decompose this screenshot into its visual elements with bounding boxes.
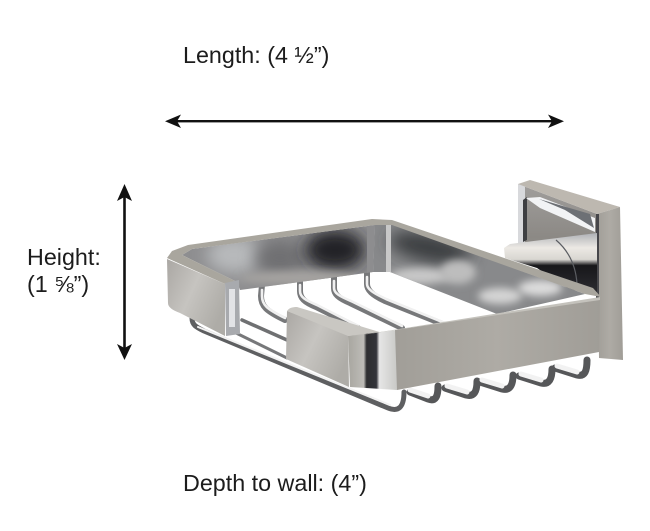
side wires: [242, 320, 287, 340]
front band: [348, 297, 600, 390]
heading: height label: (1 ⅝”): [27, 271, 89, 297]
heading: height label: [27, 244, 101, 297]
heading: length label: Length: (4 ½”): [183, 42, 329, 68]
bracket arm: [504, 233, 597, 292]
rear wires: [261, 272, 445, 328]
arrow: height: [117, 184, 132, 360]
wall bracket: [518, 180, 623, 360]
heading: height label: Height:: [27, 244, 101, 270]
dish rim: [167, 219, 601, 297]
icon: soap dish product photo: [167, 180, 623, 409]
rear dish walls: [182, 225, 585, 314]
front loops: [410, 360, 587, 400]
left satin block: [167, 259, 240, 336]
heading: depth label: Depth to wall: (4”): [183, 470, 367, 496]
front satin block: [286, 307, 383, 387]
arrow: length: [165, 114, 564, 128]
basket wires: [192, 272, 587, 409]
